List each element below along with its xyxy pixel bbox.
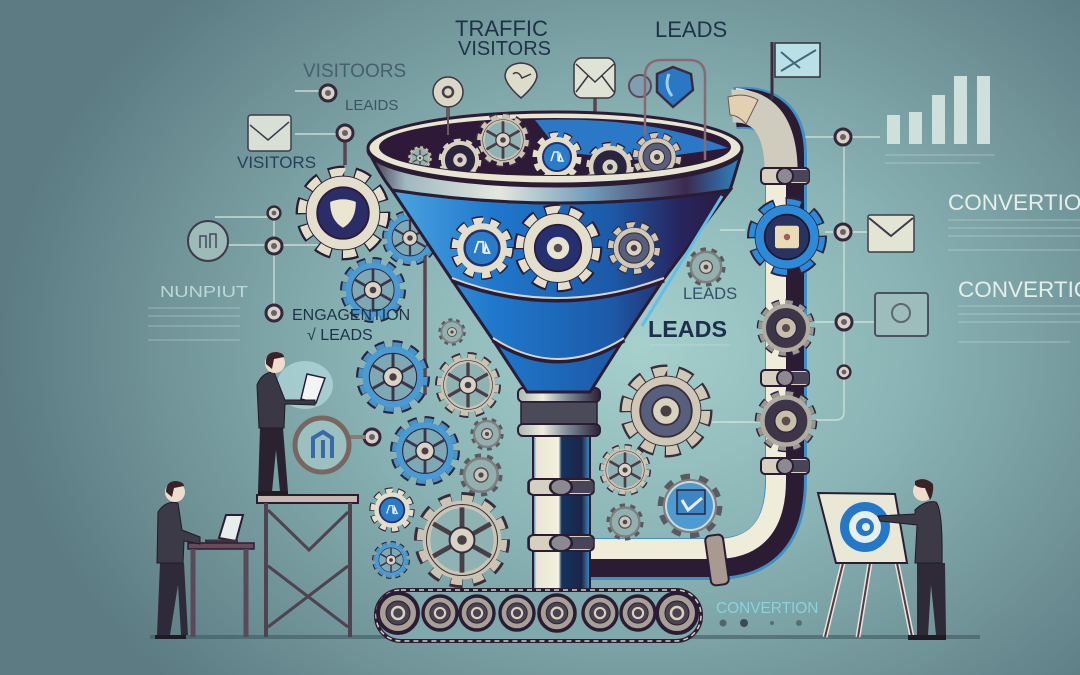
easel with target — [818, 493, 912, 637]
icon: envelope — [868, 215, 914, 252]
person at easel — [878, 479, 946, 640]
icon: screen — [875, 293, 928, 336]
laptop with glow — [277, 361, 333, 409]
icon: chart circle — [188, 221, 228, 261]
ground shadow — [150, 635, 980, 639]
person at table — [155, 481, 254, 639]
pipe top — [732, 106, 781, 180]
person on scaffold — [257, 352, 333, 495]
gears on funnel — [455, 211, 657, 285]
funnel — [368, 112, 742, 392]
bar chart — [887, 76, 990, 144]
funnel bands — [452, 280, 664, 300]
icon: heart marker — [505, 63, 537, 98]
thick connector rods — [345, 98, 595, 395]
gears behind funnel: left — [303, 173, 503, 581]
connector nodes — [266, 85, 852, 445]
vertical and elbow pipe — [560, 95, 786, 559]
left side icons — [188, 85, 852, 472]
icon: pin — [433, 77, 463, 135]
label: engagention and leads: √ LEADS — [307, 327, 373, 344]
icon: shield — [629, 67, 693, 107]
label: conversion bottom: CONVERTION — [716, 600, 818, 617]
label: visitoors: VISITOORS — [303, 61, 406, 82]
funnel rim band — [368, 150, 742, 203]
pipe clamps and pipe gears — [705, 168, 821, 586]
gears right of funnel — [603, 250, 723, 538]
pagination dots — [720, 619, 802, 627]
flag — [772, 42, 820, 100]
label: leads bold: LEADS — [648, 316, 727, 342]
table — [188, 543, 254, 637]
label: leads small: LEADS — [683, 285, 737, 303]
hook rod — [645, 60, 705, 160]
pipe mouth — [728, 95, 758, 124]
conveyor belt — [376, 590, 701, 641]
icons above funnel — [433, 58, 705, 160]
pipe joint — [705, 534, 729, 586]
scaffold — [257, 495, 358, 637]
laptop — [205, 515, 243, 541]
label: nunpiut: NUNPIUT — [160, 284, 248, 301]
label: traffic visitors: TRAFFIC — [455, 16, 548, 41]
label: visitors: VISITORS — [237, 153, 316, 172]
funnel neck coupling — [518, 388, 600, 590]
faint caption lines — [148, 155, 1080, 345]
magnifier — [295, 418, 366, 472]
label: traffic visitors: VISITORS — [458, 38, 551, 60]
gears inside funnel — [408, 112, 682, 175]
label: engagention and leads: ENGAGENTION — [292, 307, 410, 324]
board — [818, 493, 907, 563]
icon: envelope card — [248, 115, 291, 151]
right side icons — [868, 215, 928, 336]
connector lines — [215, 91, 880, 422]
target — [840, 502, 890, 552]
icon: envelope — [574, 58, 615, 98]
label: leads top: LEADS — [655, 17, 727, 42]
funnel cone — [392, 190, 730, 392]
funnel rim — [368, 112, 742, 184]
checkmark badge — [662, 478, 718, 534]
label: leaids: LEAIDS — [345, 97, 398, 114]
